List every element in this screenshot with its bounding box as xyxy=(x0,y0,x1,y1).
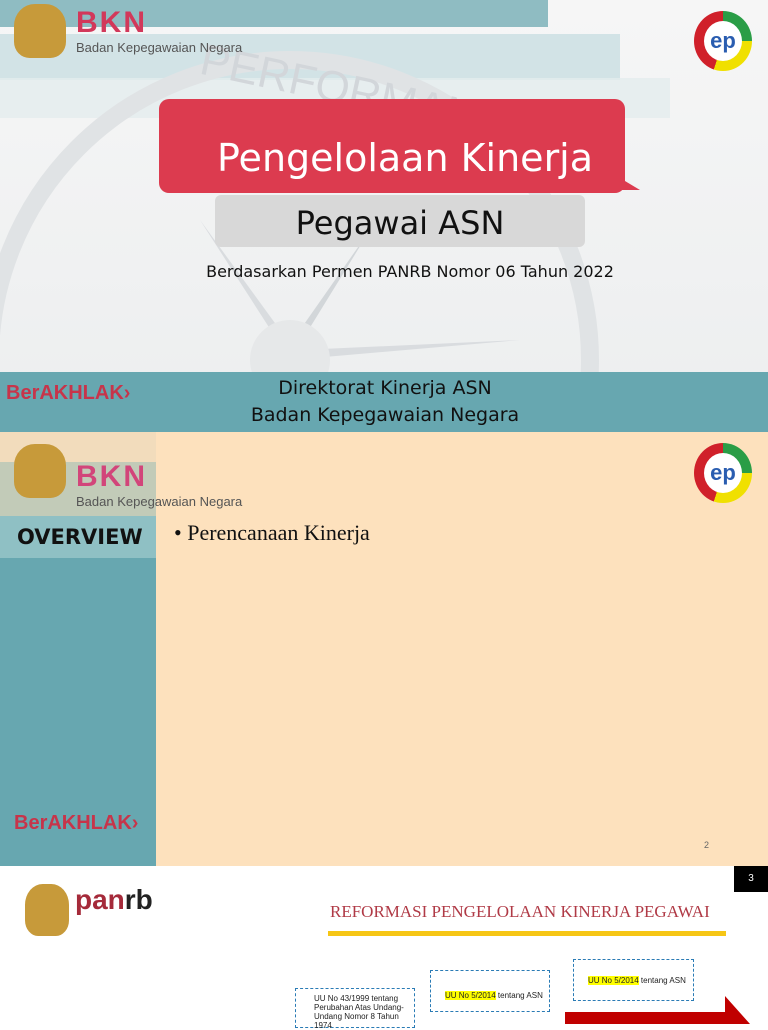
heading: OVERVIEW: OVERVIEW xyxy=(17,525,143,549)
box: UU 43/1999 xyxy=(295,988,415,1028)
box: UU 5/2014: UU No 5/2014 tentang ASN xyxy=(445,991,543,1000)
footer band xyxy=(0,372,768,432)
title: Pengelolaan Kinerja xyxy=(159,99,625,193)
page number box: 3 xyxy=(748,873,754,884)
logo: round emblem: ep xyxy=(710,28,736,53)
subtitle: Pegawai ASN: Pegawai ASN xyxy=(296,204,504,242)
slide 2: overview xyxy=(0,432,768,866)
logo: BKN xyxy=(14,444,242,509)
compass background xyxy=(0,35,599,372)
footer text xyxy=(251,377,519,426)
logo: BKN: BKN xyxy=(76,460,147,493)
logo: panrb: panrb xyxy=(75,884,153,915)
box: UU 5/2014 xyxy=(430,970,550,1012)
slide 2: overview: Badan Kepegawaian Negara xyxy=(76,494,242,509)
bullet text: • Perencanaan Kinerja xyxy=(174,520,370,545)
subtitle: Pegawai ASN xyxy=(215,195,585,247)
box: UU 43/1999: UU No 43/1999 tentang Perubahan Atas Undang-Undang Nomor 8 Tahun 1974 xyxy=(314,994,404,1030)
text: legal basis: Berdasarkan Permen PANRB Nomor 06 Tahun 2022 xyxy=(206,262,614,281)
logo: BKN: Badan Kepegawaian Negara xyxy=(76,40,242,55)
logo: BKN: BKN xyxy=(76,6,147,39)
box: UU 5/2014 (2) xyxy=(573,959,694,1001)
logo: BKN xyxy=(14,4,242,58)
logo: round emblem xyxy=(694,443,752,503)
heading: OVERVIEW xyxy=(0,516,156,558)
BerAKHLAK logo: BerAKHLAK› xyxy=(6,382,130,404)
slide 1: title xyxy=(0,0,768,432)
page number: 2 xyxy=(704,840,709,850)
title: Pengelolaan Kinerja: Pengelolaan Kinerja xyxy=(217,136,593,180)
arrow: red xyxy=(565,996,750,1024)
box: UU 5/2014 (2): UU No 5/2014 tentang ASN xyxy=(588,976,686,985)
logo: panrb xyxy=(25,884,153,936)
compass background: PERFORMANCE M xyxy=(196,35,589,164)
decorative bands xyxy=(0,0,548,27)
page number box xyxy=(734,866,768,892)
logo: round emblem xyxy=(694,11,752,71)
logo: round emblem: ep xyxy=(710,460,736,485)
slide 3: reformasi xyxy=(0,866,768,1024)
footer text: Direktorat Kinerja ASN xyxy=(278,377,492,399)
BerAKHLAK logo: BerAKHLAK› xyxy=(14,812,138,834)
heading: reformasi: REFORMASI PENGELOLAAN KINERJA PEGAWAI xyxy=(330,902,710,921)
footer text: Badan Kepegawaian Negara xyxy=(251,404,519,426)
